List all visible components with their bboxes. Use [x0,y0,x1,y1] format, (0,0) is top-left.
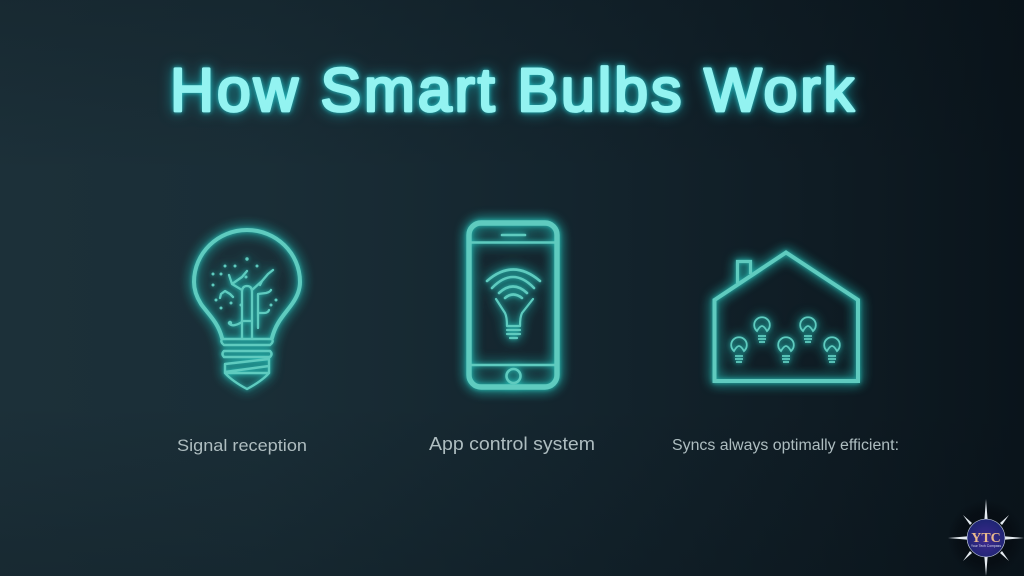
badge tagline: Your Tech Compass [971,544,1001,548]
chimney [738,262,750,283]
home button [506,369,520,383]
bulb screw base [221,339,273,389]
compass points [948,499,1024,576]
logo: YTC compass badge [948,499,1024,576]
small bulbs [731,317,840,362]
badge circle [967,519,1005,557]
icon: smartphone with wifi bulb [469,223,557,387]
icon: light bulb with circuit [194,230,300,389]
icon: house with connected bulbs [714,252,858,381]
phone body [469,223,557,387]
wifi arcs [487,270,540,298]
badge text: YTC [971,531,1001,546]
badge halo [948,500,1024,576]
house outline [714,252,858,381]
label: app control system: App control system [429,433,595,454]
bulb outline [194,230,300,338]
label: signal reception: Signal reception [177,436,307,455]
label: syncs: Syncs always optimally efficient: [672,437,899,454]
circuit dots [212,257,278,325]
phone screen dividers [472,235,555,365]
screen bulb [496,299,533,338]
title: How Smart Bulbs Work [170,56,854,124]
filament and circuit branches [220,270,273,338]
